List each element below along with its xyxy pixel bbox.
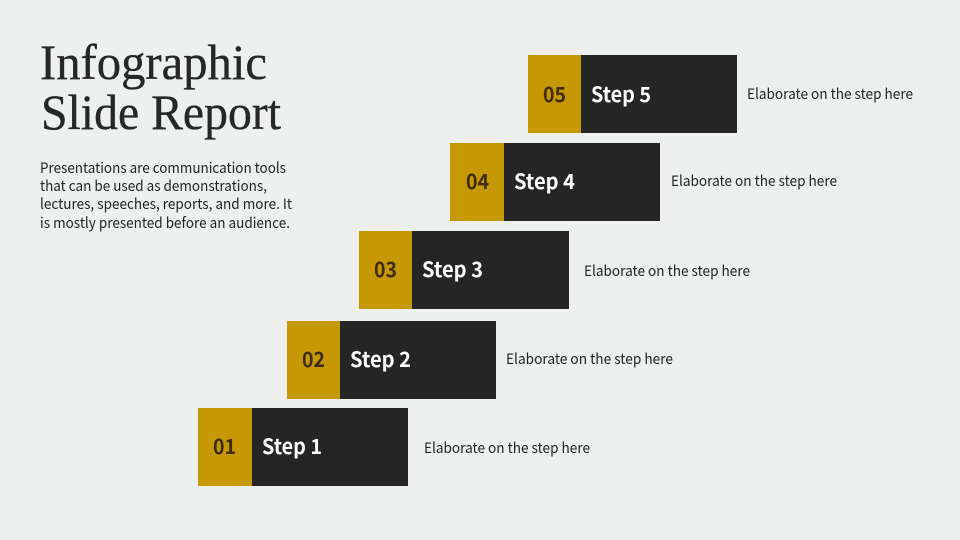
step 5 [528, 55, 913, 133]
title [40, 34, 281, 140]
step 4 [450, 143, 837, 221]
step 1 [198, 408, 590, 486]
intro text block [40, 157, 292, 233]
intro text block: Presentations are communication tools [40, 157, 286, 178]
step 4: Step 4 [514, 166, 575, 196]
title: Slide Report [41, 84, 281, 140]
step 1: Step 1 [262, 431, 322, 461]
intro text block: is mostly presented before an audience. [40, 212, 290, 233]
title: Infographic [40, 34, 267, 90]
step 4: Elaborate on the step here [671, 170, 837, 191]
intro text block: lectures, speeches, reports, and more. It [40, 193, 292, 214]
step 3: 03 [374, 254, 397, 284]
step 5: Step 5 [591, 79, 651, 109]
step 3: Step 3 [422, 254, 483, 284]
step 5: 05 [543, 79, 566, 109]
step 2: 02 [302, 344, 325, 374]
step 3: Elaborate on the step here [584, 260, 750, 281]
step 4: 04 [466, 166, 489, 196]
step 2: Step 2 [350, 344, 411, 374]
step 1: 01 [213, 431, 236, 461]
step 2: Elaborate on the step here [506, 348, 673, 369]
step 3 [359, 231, 750, 309]
step 5: Elaborate on the step here [747, 83, 913, 104]
step 2 [287, 321, 673, 399]
intro text block: that can be used as demonstrations, [40, 175, 267, 196]
step 1: Elaborate on the step here [424, 437, 590, 458]
